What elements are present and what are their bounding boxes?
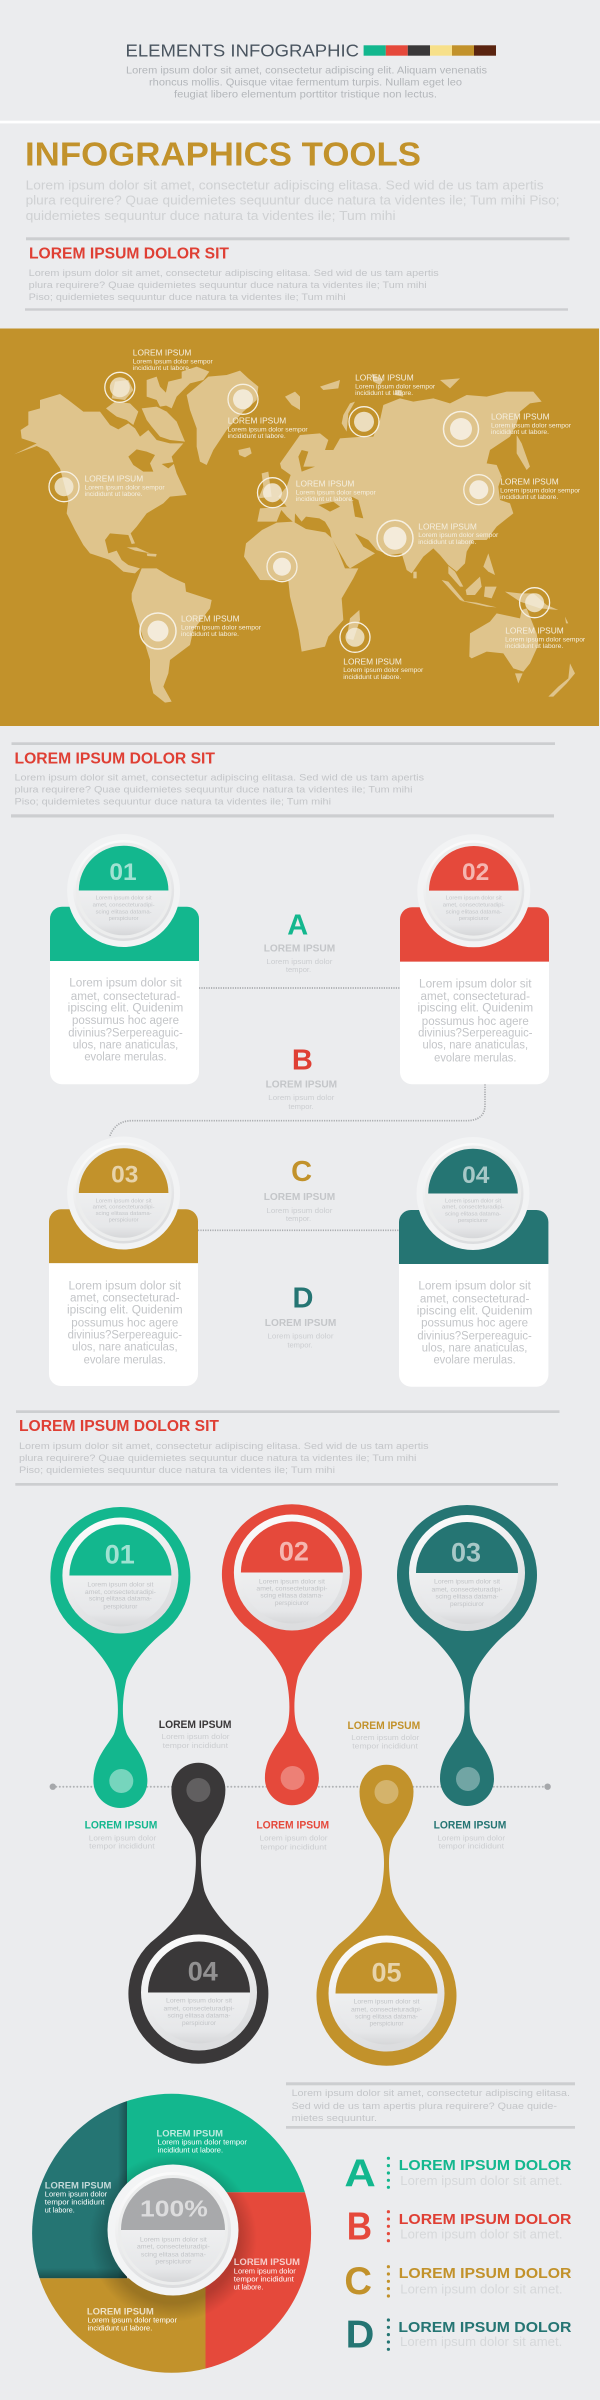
pin label: red: tempor incididunt — [260, 1842, 327, 1851]
map labels: incididunt ut labore. — [355, 390, 413, 397]
location marker: south america — [140, 613, 176, 649]
main heading block — [25, 136, 560, 223]
card 03 badge text — [93, 1199, 155, 1224]
pin 05 — [316, 1765, 456, 2066]
card 04 badge text — [442, 1199, 504, 1224]
location marker: north america — [49, 472, 79, 502]
map labels: Lorem ipsum dolor sempor — [228, 426, 309, 433]
centre label B: B — [292, 1044, 313, 1076]
pin 03 — [397, 1505, 537, 1806]
pin label: gold: Lorem ipsum dolor — [351, 1733, 420, 1742]
card 02 text — [418, 979, 533, 1065]
segment label: green: incididunt ut labore. — [158, 2146, 223, 2155]
timeline dotted axis — [50, 1784, 551, 1790]
card 01 text: evolare merulas. — [84, 1052, 167, 1064]
segment label: red: ut labore. — [234, 2283, 263, 2292]
card 03 number: 03 — [111, 1161, 138, 1188]
main heading: INFOGRAPHICS TOOLS — [25, 136, 421, 173]
card 01 text: divinius?Serpereaguic- — [68, 1028, 183, 1040]
text panel: intro 1 — [25, 237, 570, 311]
card 04 badge — [416, 1137, 530, 1250]
pie centre text: Lorem ipsum dolor sit — [140, 2237, 207, 2244]
legend item B — [347, 2205, 572, 2248]
card 02 badge text: perspiciuror — [459, 916, 489, 922]
card 03 header — [49, 1209, 198, 1263]
card 02 text: possumus hoc agere — [422, 1016, 529, 1028]
pin 04 disc text: Lorem ipsum dolor sit — [166, 1998, 232, 2005]
main paragraph: Lorem ipsum dolor sit amet, consectetur adipiscing elitasa. Sed wid de us tam apertis — [26, 177, 544, 192]
title: ELEMENTS INFOGRAPHIC — [126, 41, 359, 61]
pie centre text: perspiciuror — [155, 2258, 192, 2265]
pin 04 disc text: amet, consecteturadipi- — [164, 2006, 234, 2013]
map labels: incididunt ut labore. — [343, 674, 401, 681]
pin 02 disc text: perspiciuror — [275, 1600, 310, 1607]
pin label: red — [256, 1820, 329, 1851]
pin 05 disc text — [351, 1998, 422, 2028]
card 03 text — [67, 1280, 183, 1366]
legend item B: Lorem ipsum dolor sit amet. — [400, 2226, 563, 2241]
legend item A: Lorem ipsum dolor sit amet. — [400, 2173, 563, 2188]
pin 01 disc text: amet, consecteturadipi- — [85, 1589, 156, 1596]
map labels: Lorem ipsum dolor sempor — [181, 624, 262, 631]
header block — [126, 41, 496, 101]
map labels: Lorem ipsum dolor sempor — [505, 636, 586, 643]
card 01 text — [68, 978, 183, 1064]
pin label: red: LOREM IPSUM — [256, 1820, 329, 1832]
map labels: Lorem ipsum dolor sempor — [355, 383, 436, 390]
pin 05 number: 05 — [371, 1957, 402, 1987]
pin 04 disc text — [164, 1998, 234, 2027]
pin 02 — [222, 1504, 362, 1805]
pin label: teal: LOREM IPSUM — [434, 1820, 506, 1832]
card 02 badge text: amet, consecteturadipi- — [443, 903, 505, 909]
card 03 badge text: Lorem ipsum dolor sit — [96, 1199, 152, 1205]
card 04 badge text: perspiciuror — [458, 1218, 488, 1224]
panel body — [19, 1441, 429, 1476]
legend item A — [344, 2153, 572, 2196]
card 01 badge text: amet, consecteturadipi- — [93, 903, 155, 909]
legend item A: LOREM IPSUM DOLOR — [399, 2157, 572, 2174]
header intro text: feugiat libero elementum porttitor tristique non lectus. — [174, 90, 437, 101]
pin 02 disc text — [256, 1578, 327, 1607]
pie segments — [30, 2090, 312, 2378]
card 03 badge — [67, 1136, 180, 1250]
card 03 body — [49, 1263, 198, 1386]
pin label: gold — [348, 1720, 420, 1750]
card 01 text: Lorem ipsum dolor sit — [69, 978, 183, 990]
pin 02 disc text: scing elitasa datama- — [260, 1592, 323, 1599]
card 01 number: 01 — [109, 859, 137, 886]
segment label: red — [234, 2257, 300, 2292]
card 03 text: ipiscing elit. Quidenim — [67, 1305, 183, 1317]
segment label: green — [156, 2129, 248, 2155]
pin 03 disc text: perspiciuror — [450, 1601, 485, 1608]
main paragraph: plura requirere? Quae quidemietes sequuntur duce natura ta videntes ile; Tum mihi Piso; — [26, 192, 560, 207]
card 03 text: ulos, nare anaticulas, — [72, 1342, 178, 1354]
map labels: Lorem ipsum dolor sempor — [491, 422, 572, 429]
pin 04 disc text: perspiciuror — [182, 2020, 217, 2027]
card 02 badge text: Lorem ipsum dolor sit — [446, 896, 502, 902]
pin 02 bulb dot — [281, 1766, 305, 1790]
card 04 text: divinius?Serpereaguic- — [417, 1330, 532, 1342]
pin label: gold: tempor incididunt — [352, 1741, 419, 1750]
pie centre value: 100% — [140, 2196, 208, 2222]
pin 03 disc text: amet, consecteturadipi- — [432, 1586, 502, 1593]
pie intro body: Lorem ipsum dolor sit amet, consectetur adipiscing elitasa. — [292, 2088, 570, 2099]
header intro text: rhoncus mollis. Quisque vitae fermentum turpis. Nullam eget leo — [149, 78, 462, 89]
legend item B: B — [347, 2205, 372, 2248]
card 04 body — [399, 1264, 548, 1387]
legend item A: A — [344, 2153, 376, 2196]
location marker: madagascar — [340, 622, 370, 652]
pin 05 disc text: scing elitasa datama- — [355, 2013, 418, 2020]
pin 03 disc text — [432, 1578, 502, 1608]
card 04 text — [417, 1280, 532, 1366]
pin 01 number: 01 — [105, 1539, 135, 1569]
pin label: green — [85, 1820, 157, 1850]
pin 04 disc text: scing elitasa datama- — [168, 2012, 230, 2019]
pin label: dark — [159, 1719, 232, 1750]
pin 04 bulb dot — [186, 1778, 210, 1802]
card 02 text: amet, consecteturad- — [421, 991, 530, 1003]
pie intro body — [292, 2088, 570, 2124]
pin label: green: Lorem ipsum dolor — [89, 1833, 157, 1842]
panel body: plura requirere? Quae quidemietes sequuntur duce natura ta videntes ile; Tum mihi — [14, 785, 412, 796]
card 01 badge text: Lorem ipsum dolor sit — [96, 895, 152, 901]
card 04 number: 04 — [462, 1162, 490, 1189]
card 04 header — [399, 1210, 548, 1264]
map labels: incididunt ut labore. — [181, 631, 239, 638]
pin label: dark: tempor incididunt — [163, 1741, 229, 1750]
pin 01 disc text: perspiciuror — [103, 1603, 138, 1610]
pie centre text: amet, consecteturadipi- — [137, 2243, 210, 2250]
card 03 text: amet, consecteturad- — [70, 1293, 180, 1305]
panel body: plura requirere? Quae quidemietes sequuntur duce natura ta videntes ile; Tum mihi — [19, 1453, 416, 1464]
legend item D: LOREM IPSUM DOLOR — [398, 2319, 572, 2336]
card 01 — [50, 834, 199, 1084]
legend item C: Lorem ipsum dolor sit amet. — [400, 2281, 563, 2296]
card 02 text: divinius?Serpereaguic- — [418, 1028, 533, 1040]
map labels: LOREM IPSUM — [85, 474, 143, 484]
pin 04 disc — [141, 1934, 257, 2050]
pin label: teal: Lorem ipsum dolor — [437, 1833, 506, 1842]
segment label: gold: Lorem ipsum dolor tempor — [88, 2316, 178, 2325]
location marker: greenland — [228, 384, 258, 414]
card 02 badge text — [443, 896, 505, 922]
pin 05 bulb dot — [374, 1780, 398, 1804]
pin label: gold: LOREM IPSUM — [348, 1720, 420, 1732]
pin 05 disc — [328, 1936, 444, 2052]
segment label: red: LOREM IPSUM — [234, 2257, 300, 2268]
location marker: oceania — [520, 588, 550, 618]
location marker: india — [377, 520, 413, 556]
panel body — [29, 268, 439, 303]
panel body: Lorem ipsum dolor sit amet, consectetur adipiscing elitasa. Sed wid de us tam apertis — [29, 268, 439, 279]
pin 01 — [50, 1507, 190, 1808]
pin label: dark: LOREM IPSUM — [159, 1719, 232, 1731]
pin label: red: Lorem ipsum dolor — [260, 1833, 328, 1842]
centre label D: Lorem ipsum dolor — [268, 1331, 334, 1340]
centre label B — [266, 1044, 337, 1111]
card 01 text: possumus hoc agere — [72, 1015, 179, 1027]
card 01 badge text: scing elitasa datama- — [96, 909, 152, 915]
panel body: Lorem ipsum dolor sit amet, consectetur adipiscing elitasa. Sed wid de us tam apertis — [14, 773, 424, 784]
panel body: Lorem ipsum dolor sit amet, consectetur adipiscing elitasa. Sed wid de us tam apertis — [19, 1441, 429, 1452]
card 04 badge text: scing elitasa datama- — [445, 1212, 501, 1218]
pin 02 number: 02 — [279, 1537, 309, 1567]
card 02 text: ipiscing elit. Quidenim — [418, 1003, 533, 1015]
segment label: gold: LOREM IPSUM — [87, 2307, 154, 2318]
panel body: Piso; quidemietes sequuntur duce natura ta videntes ile; Tum mihi — [14, 797, 331, 808]
pin label: green: tempor incididunt — [89, 1841, 156, 1850]
connector lines between cards — [110, 988, 485, 1230]
map labels: LOREM IPSUM — [491, 412, 550, 422]
map labels: LOREM IPSUM — [181, 614, 240, 624]
panel heading: LOREM IPSUM DOLOR SIT — [14, 750, 215, 767]
card 01 badge text — [93, 895, 155, 922]
card 02 text: evolare merulas. — [434, 1053, 516, 1065]
card 02 text: ulos, nare anaticulas, — [422, 1040, 528, 1052]
pin 01 disc — [62, 1518, 178, 1634]
card 02 — [400, 834, 549, 1084]
map labels: Lorem ipsum dolor sempor — [133, 358, 214, 365]
segment label: teal: LOREM IPSUM — [45, 2181, 111, 2192]
pie intro body: mietes sequuntur. — [292, 2113, 377, 2124]
card 04 text: amet, consecteturad- — [420, 1293, 530, 1305]
card 03 text: evolare merulas. — [84, 1354, 166, 1366]
map labels: LOREM IPSUM — [505, 626, 564, 636]
location marker: siberia — [444, 412, 478, 446]
pin 02 disc text: Lorem ipsum dolor sit — [259, 1578, 325, 1585]
pin label: dark: Lorem ipsum dolor — [162, 1732, 230, 1741]
map labels: Lorem ipsum dolor sempor — [418, 532, 499, 539]
legend item C: C — [344, 2260, 372, 2303]
card 04 — [399, 1137, 548, 1387]
pin 05 disc text: perspiciuror — [370, 2021, 404, 2028]
panel heading: LOREM IPSUM DOLOR SIT — [19, 1418, 219, 1435]
centre label A: LOREM IPSUM — [264, 943, 335, 955]
pin label: teal — [434, 1820, 506, 1850]
card 02 body — [400, 962, 549, 1084]
segment label: teal: tempor incididunt — [45, 2198, 104, 2207]
location marker: china — [464, 475, 494, 505]
segment label: red: Lorem ipsum dolor — [234, 2267, 296, 2276]
main paragraph — [26, 177, 560, 223]
map labels: LOREM IPSUM — [343, 656, 402, 666]
location marker: west europe — [258, 478, 288, 508]
pin 04 — [128, 1763, 268, 2064]
world map land masses — [14, 367, 575, 703]
card 04 text: ulos, nare anaticulas, — [422, 1343, 527, 1355]
pin 01 disc text — [85, 1582, 156, 1610]
centre label C: Lorem ipsum dolor — [266, 1206, 333, 1215]
card 01 text: amet, consecteturad- — [71, 991, 180, 1003]
card 03 — [49, 1136, 198, 1386]
segment label: gold: incididunt ut labore. — [88, 2324, 152, 2333]
card 04 text: possumus hoc agere — [421, 1318, 528, 1330]
card 02 badge text: scing elitasa datama- — [446, 909, 502, 915]
map labels: Lorem ipsum dolor sempor — [85, 484, 165, 491]
text panel: intro 2 — [11, 742, 555, 818]
map labels: incididunt ut labore. — [133, 365, 191, 372]
pin 03 disc text: Lorem ipsum dolor sit — [434, 1578, 500, 1585]
centre label D — [265, 1283, 337, 1349]
card 04 text: ipiscing elit. Quidenim — [417, 1305, 532, 1317]
map labels: LOREM IPSUM — [228, 416, 286, 426]
pin 01 disc text: Lorem ipsum dolor sit — [87, 1582, 154, 1589]
pin 03 number: 03 — [451, 1537, 481, 1567]
map labels: Lorem ipsum dolor sempor — [296, 489, 377, 496]
colour palette bar — [364, 45, 496, 56]
card 01 badge — [67, 834, 180, 947]
map labels: incididunt ut labore. — [85, 491, 143, 498]
map labels: Lorem ipsum dolor sempor — [343, 667, 424, 674]
centre label A: A — [287, 909, 308, 941]
panel body: Piso; quidemietes sequuntur duce natura ta videntes ile; Tum mihi — [29, 292, 346, 303]
pie chart — [30, 2090, 312, 2378]
card 03 badge text: amet, consecteturadipi- — [93, 1204, 155, 1210]
card 03 badge text: perspiciuror — [109, 1218, 139, 1224]
segment label: green: Lorem ipsum dolor tempor — [158, 2138, 248, 2147]
centre label B: Lorem ipsum dolor — [268, 1093, 335, 1102]
pin label: teal: tempor incididunt — [439, 1841, 505, 1850]
segment label: teal: Lorem ipsum dolor — [45, 2190, 108, 2199]
header intro text — [126, 65, 487, 101]
legend item D: Lorem ipsum dolor sit amet. — [400, 2334, 562, 2349]
map labels: LOREM IPSUM — [418, 521, 477, 531]
centre label B: tempor. — [288, 1102, 314, 1111]
map labels: incididunt ut labore. — [296, 496, 354, 503]
segment label: red: tempor incididunt — [234, 2275, 294, 2284]
legend item B: LOREM IPSUM DOLOR — [399, 2211, 572, 2228]
white divider band — [0, 121, 600, 123]
legend item D: D — [346, 2313, 374, 2356]
map labels: incididunt ut labore. — [505, 643, 563, 650]
card 04 text: Lorem ipsum dolor sit — [418, 1280, 532, 1292]
segment label: gold — [87, 2307, 178, 2333]
pin 02 disc — [234, 1514, 350, 1630]
pie intro body: Sed wid de us tam apertis plura requirere? Quae quide- — [292, 2101, 557, 2112]
centre label A: Lorem ipsum dolor — [266, 957, 333, 966]
legend item C — [344, 2260, 572, 2303]
card 04 badge text: Lorem ipsum dolor sit — [445, 1199, 502, 1205]
segment label: teal — [45, 2181, 111, 2215]
main paragraph: quidemietes sequuntur duce natura ta videntes ile; Tum mihi — [26, 208, 396, 223]
card 02 number: 02 — [462, 859, 489, 886]
centre label C: tempor. — [286, 1214, 311, 1223]
legend item D — [346, 2313, 572, 2356]
location marker: africa — [267, 552, 297, 582]
panel body: plura requirere? Quae quidemietes sequuntur duce natura ta videntes ile; Tum mihi — [29, 280, 427, 291]
card 03 text: divinius?Serpereaguic- — [68, 1330, 182, 1342]
map labels: incididunt ut labore. — [228, 433, 286, 440]
text panel: pie intro — [286, 2082, 575, 2129]
pie centre badge — [108, 2164, 238, 2296]
map labels: incididunt ut labore. — [500, 494, 558, 501]
card 01 body — [50, 961, 199, 1084]
panel body — [14, 773, 424, 808]
centre label D: tempor. — [287, 1340, 313, 1349]
map labels: incididunt ut labore. — [418, 539, 476, 546]
card 02 header — [400, 907, 549, 962]
card 02 text: Lorem ipsum dolor sit — [419, 979, 532, 991]
centre label C: LOREM IPSUM — [264, 1191, 335, 1203]
segment label: teal: ut labore. — [45, 2206, 75, 2215]
centre label B: LOREM IPSUM — [266, 1079, 337, 1091]
header intro text: Lorem ipsum dolor sit amet, consectetur adipiscing elit. Aliquam venenatis — [126, 65, 487, 76]
centre label D: D — [293, 1283, 313, 1315]
segment label: green: LOREM IPSUM — [156, 2129, 223, 2140]
map labels: LOREM IPSUM — [500, 477, 559, 487]
location marker: arctic canada — [105, 372, 135, 402]
centre label A: tempor. — [286, 965, 311, 974]
pin 01 bulb dot — [109, 1769, 133, 1793]
pin 03 bulb dot — [456, 1767, 480, 1791]
card 01 text: ulos, nare anaticulas, — [73, 1040, 178, 1052]
card 01 text: ipiscing elit. Quidenim — [68, 1003, 183, 1015]
pin 05 disc text: Lorem ipsum dolor sit — [354, 1998, 420, 2005]
map labels: Lorem ipsum dolor sempor — [500, 487, 581, 494]
legend item C: LOREM IPSUM DOLOR — [399, 2265, 572, 2282]
panel heading: LOREM IPSUM DOLOR SIT — [29, 245, 229, 262]
pin 02 disc text: amet, consecteturadipi- — [256, 1586, 327, 1593]
pin 05 disc text: amet, consecteturadipi- — [351, 2007, 422, 2014]
map labels — [85, 348, 586, 681]
map labels: LOREM IPSUM — [296, 479, 354, 489]
text panel: intro 3 — [15, 1410, 560, 1486]
card 02 badge — [417, 834, 530, 947]
card 01 badge text: perspiciuror — [109, 916, 139, 922]
panel body: Piso; quidemietes sequuntur duce natura ta videntes ile; Tum mihi — [19, 1465, 335, 1476]
card 03 text: possumus hoc agere — [71, 1318, 178, 1330]
card 03 text: Lorem ipsum dolor sit — [69, 1280, 182, 1292]
centre label D: LOREM IPSUM — [265, 1317, 337, 1329]
card 01 header — [50, 907, 199, 961]
pie centre text: scing elitasa datama- — [141, 2252, 206, 2259]
location marker: north europe — [349, 407, 379, 437]
pin 03 disc — [409, 1515, 525, 1631]
centre label C: C — [291, 1156, 312, 1188]
panel: world map — [0, 328, 599, 726]
pin 04 number: 04 — [188, 1957, 218, 1987]
card 04 text: evolare merulas. — [433, 1354, 516, 1366]
card 03 badge text: scing elitasa datama- — [96, 1211, 152, 1217]
pie centre text — [137, 2237, 210, 2265]
pin 03 disc text: scing elitasa datama- — [436, 1593, 498, 1600]
centre label A — [264, 909, 335, 974]
centre label C — [264, 1156, 335, 1223]
map labels: incididunt ut labore. — [491, 429, 549, 436]
pin label: green: LOREM IPSUM — [85, 1820, 157, 1832]
map labels: LOREM IPSUM — [133, 348, 191, 358]
pin 01 disc text: scing elitasa datama- — [89, 1596, 152, 1603]
card 04 badge text: amet, consecteturadipi- — [442, 1205, 504, 1211]
map labels: LOREM IPSUM — [355, 373, 414, 383]
